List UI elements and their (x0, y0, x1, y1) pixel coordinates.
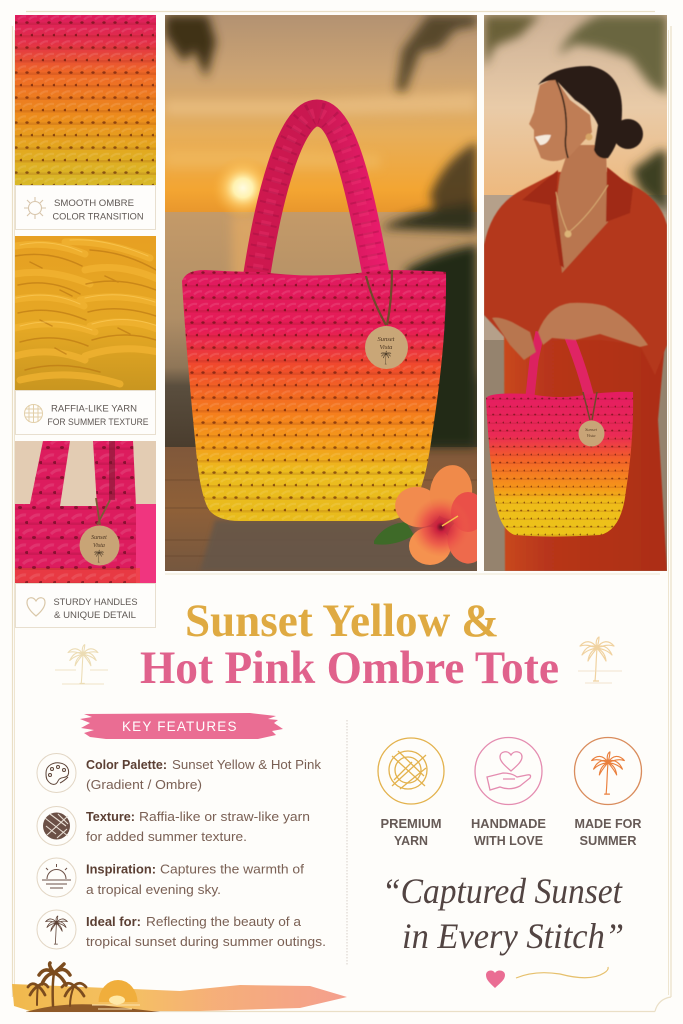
wooden tag: Vista (380, 344, 392, 351)
blurred palm fronds (165, 15, 477, 92)
small tote bag (486, 332, 633, 536)
feature: color palette (37, 754, 322, 792)
badge: handmade with love (471, 738, 546, 848)
caption: raffia yarn: RAFFIA-LIKE YARN (51, 404, 137, 414)
icon: pink heart (486, 971, 505, 988)
caption: smooth ombre: COLOR TRANSITION (52, 212, 144, 222)
feature: ideal for: tropical sunset during summer outings. (86, 934, 326, 949)
panel: woman holding tote (484, 15, 667, 571)
icon: heart outline (27, 598, 45, 616)
hibiscus flower (374, 465, 477, 565)
wooden tag (80, 526, 120, 566)
feature: inspiration: a tropical evening sky. (86, 882, 221, 897)
feature: inspiration: Captures the warmth of (160, 862, 304, 876)
main tote bag (182, 113, 446, 521)
panel: ombre texture photo (15, 15, 156, 230)
blurred clouds and light (165, 92, 477, 285)
title: Hot Pink Ombre Tote (140, 642, 559, 694)
title: Sunset Yellow & (185, 595, 499, 647)
feature: inspiration (37, 858, 304, 897)
badge: handmade with love: WITH LOVE (474, 834, 543, 848)
hair and bun (538, 66, 622, 158)
caption: smooth ombre: SMOOTH OMBRE (54, 198, 134, 209)
feature: color palette: (Gradient / Ombre) (86, 777, 202, 792)
tag cord (96, 498, 110, 525)
icon: yarn weave (24, 404, 42, 423)
caption: smooth ombre (16, 186, 156, 230)
panel: raffia texture photo (12, 236, 160, 434)
face (529, 78, 592, 161)
icon: palette (37, 754, 76, 792)
icon: right title palm (578, 637, 622, 683)
bag body (182, 270, 446, 521)
feature: color palette: Sunset Yellow & Hot Pink (172, 757, 322, 772)
icon: sunset (37, 858, 76, 897)
woman figure (484, 66, 667, 571)
badge: made for summer: MADE FOR (574, 817, 642, 831)
ground and sun reflection (26, 1004, 160, 1012)
blouse (484, 172, 667, 375)
small wooden tag: Vista (587, 433, 596, 438)
caption: sturdy handles: STURDY HANDLES (54, 597, 138, 608)
neck and chest (556, 145, 608, 273)
feature: ideal for: Reflecting the beauty of a (146, 914, 302, 929)
wooden tag: Vista (93, 543, 105, 549)
icon: palm (37, 910, 76, 949)
feature: texture (37, 806, 310, 846)
key features banner: KEY FEATURES (122, 719, 238, 734)
footer sunset beach scene (12, 963, 347, 1012)
wooden tag (365, 326, 408, 369)
small wooden tag: Sunset (585, 427, 598, 432)
tag cord (366, 270, 392, 325)
wooden tag: Sunset (91, 535, 107, 541)
feature: texture: for added summer texture. (86, 829, 247, 844)
script quote (382, 871, 624, 956)
wood table planks and shadow (165, 480, 477, 571)
script quote: in Every Stitch” (402, 916, 624, 956)
icon: left title palm (55, 645, 108, 684)
script quote: “Captured Sunset (382, 871, 623, 911)
caption: raffia yarn: FOR SUMMER TEXTURE (48, 417, 148, 428)
caption: raffia yarn (16, 390, 156, 434)
feature: color palette: Color Palette: (86, 757, 167, 772)
feature: ideal for (37, 910, 326, 949)
badge: premium yarn (378, 738, 444, 848)
blurred island and trees (380, 142, 477, 447)
blurred palms (484, 15, 667, 212)
panel: main tote photo at sunset (165, 15, 490, 571)
badge: premium yarn: PREMIUM (380, 817, 442, 831)
icon: sun (24, 197, 46, 219)
feature: texture: Texture: (86, 809, 135, 824)
necklace (556, 185, 608, 233)
handle (256, 113, 377, 280)
caption: sturdy handles: & UNIQUE DETAIL (54, 610, 136, 621)
decorative swoosh (516, 967, 608, 978)
feature: inspiration: Inspiration: (86, 862, 156, 876)
arms and hands (492, 303, 648, 360)
title (140, 595, 559, 694)
dress lower (504, 320, 667, 571)
collars (522, 170, 564, 268)
key features banner (80, 713, 283, 739)
feature: texture: Raffia-like or straw-like yarn (139, 809, 310, 824)
icon: yarn ball (37, 806, 76, 846)
icon: heart in hand (475, 738, 542, 804)
icon: palm (574, 738, 642, 804)
caption: sturdy handles (16, 584, 156, 628)
sun (98, 980, 138, 1002)
palm silhouettes (28, 963, 86, 1006)
badge: made for summer (574, 738, 642, 848)
sun (218, 166, 264, 216)
small wooden tag (578, 420, 604, 446)
badge: premium yarn: YARN (394, 834, 428, 848)
badge: handmade with love: HANDMADE (471, 817, 546, 831)
wooden tag: Sunset (378, 336, 395, 343)
feature: ideal for: Ideal for: (86, 914, 141, 929)
icon: yarn ball (378, 738, 444, 804)
badge: made for summer: SUMMER (580, 834, 636, 848)
panel: handle detail photo (15, 441, 156, 628)
